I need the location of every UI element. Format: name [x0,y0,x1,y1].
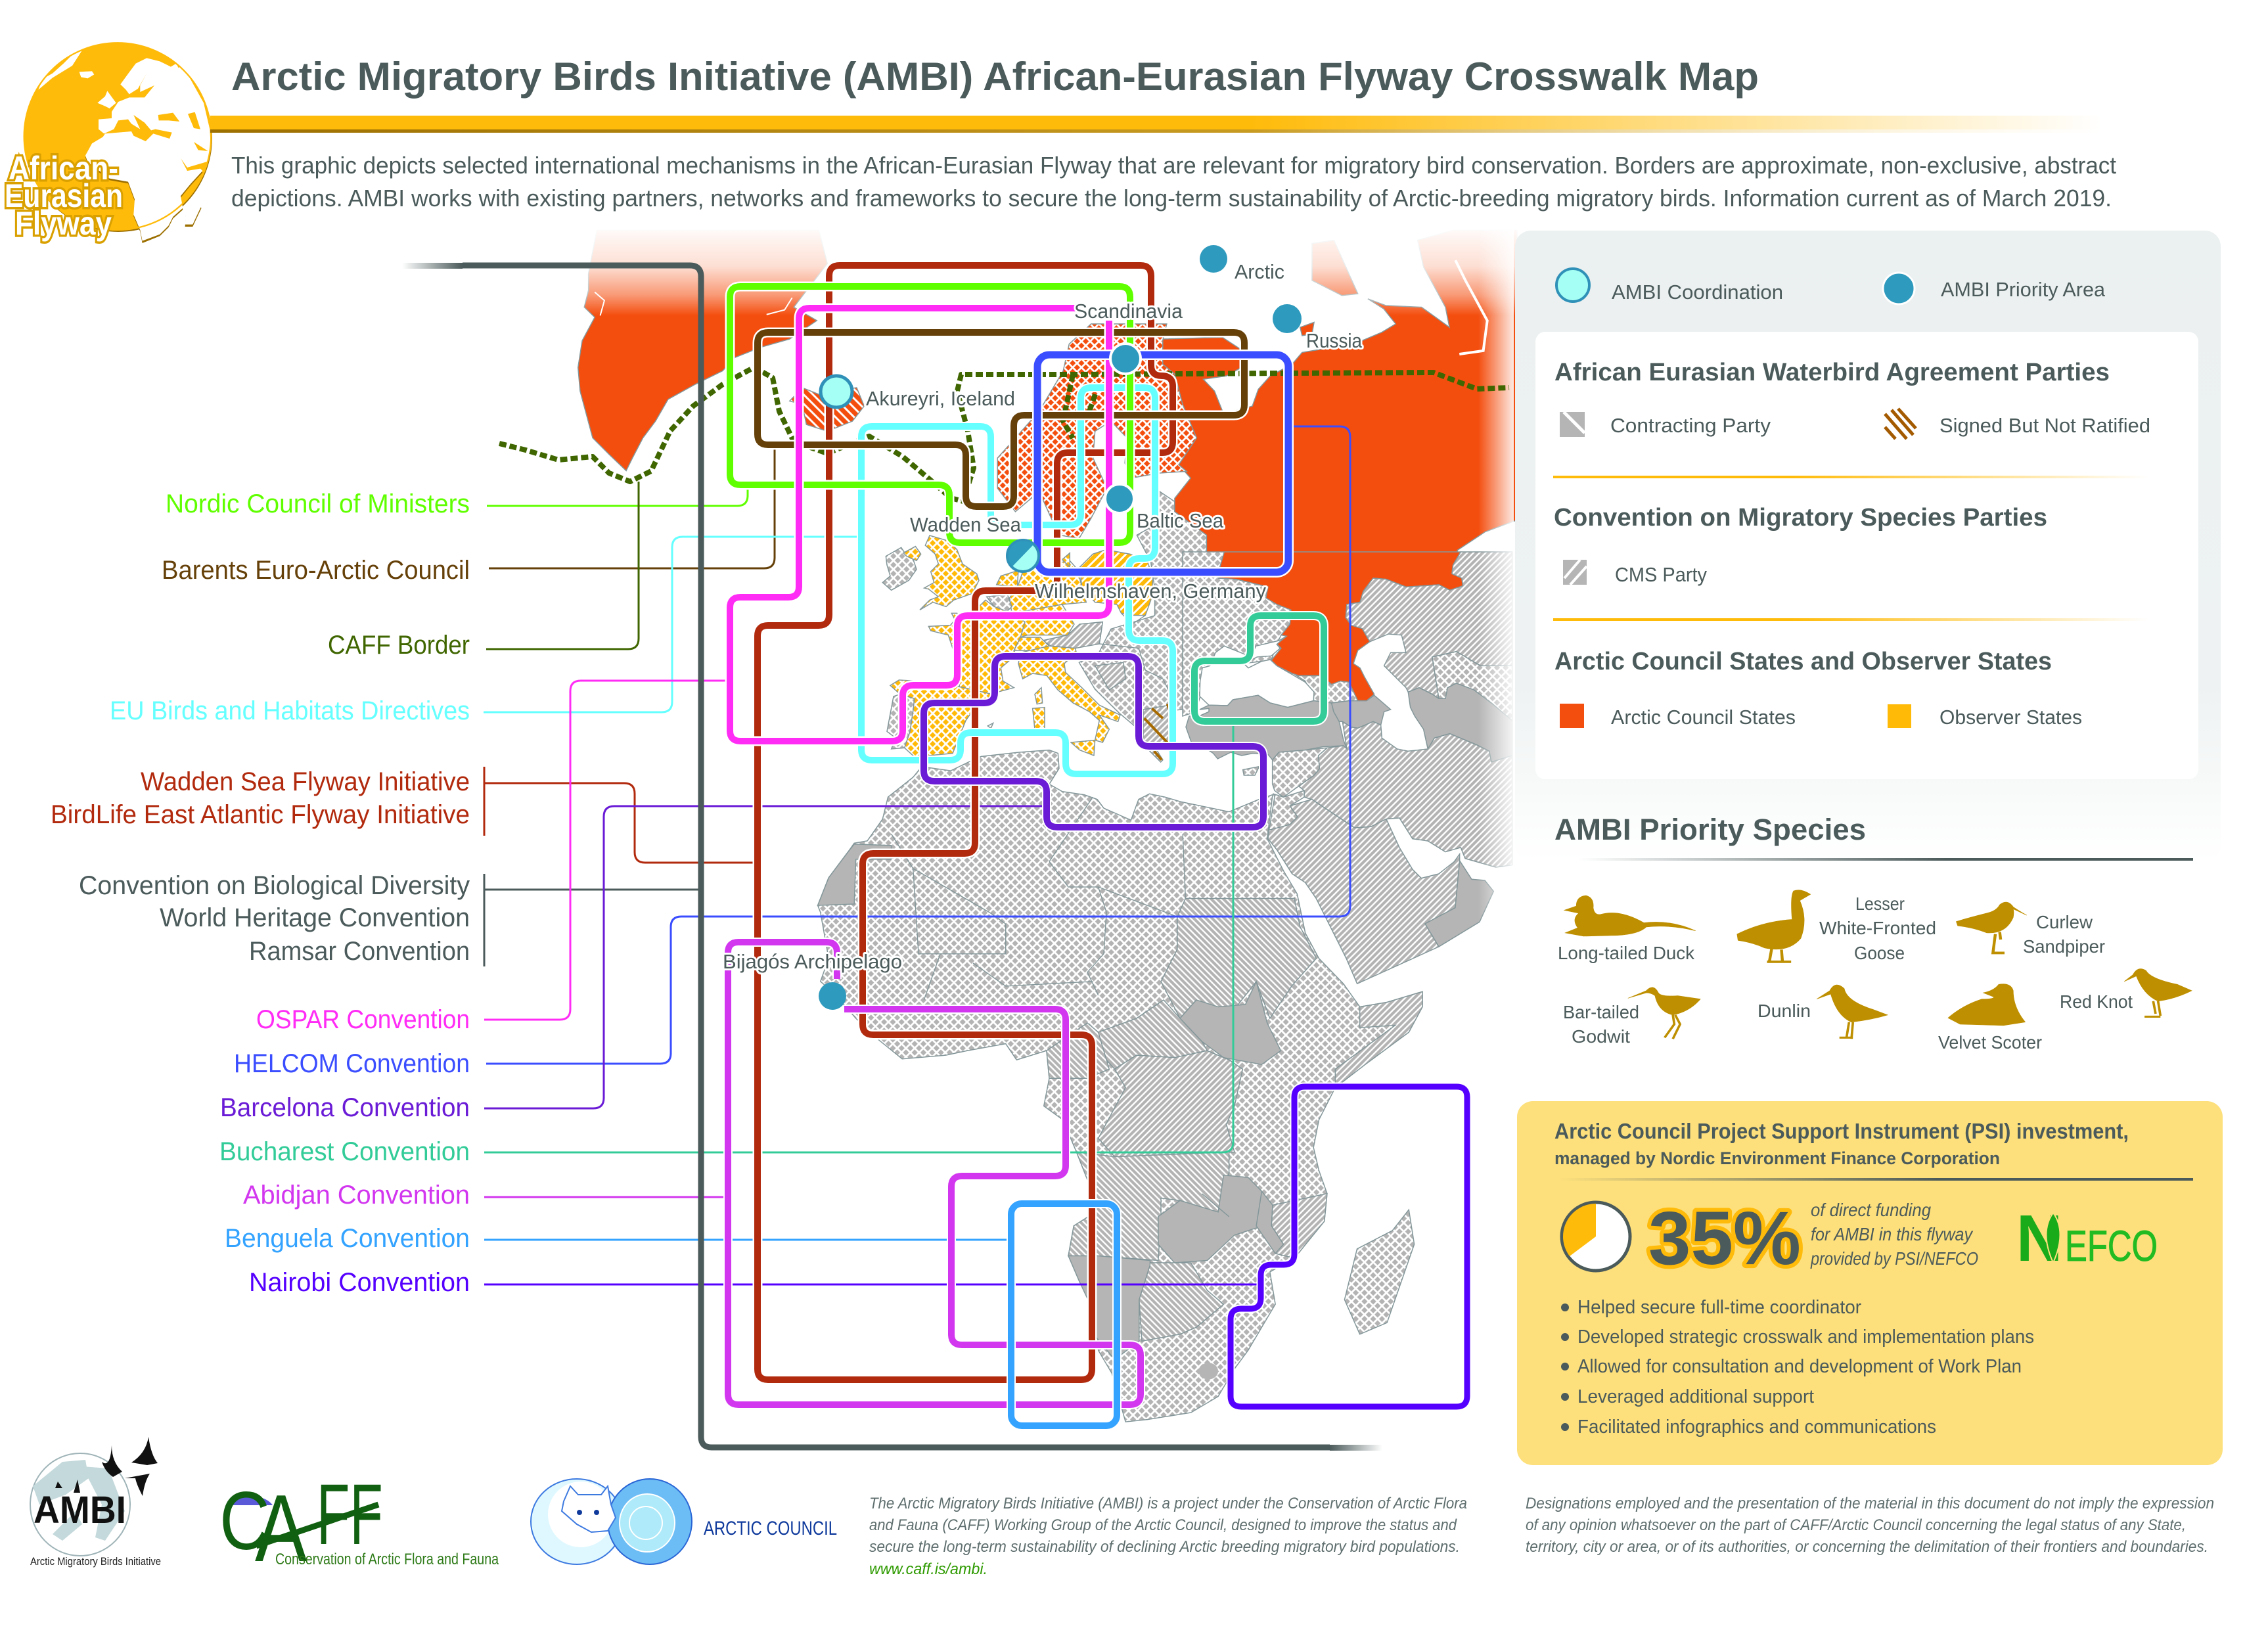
species names: Godwit [1572,1026,1630,1047]
heading: African Eurasian Waterbird Agreement Parties: African Eurasian Waterbird Agreement Parties [1554,359,2110,386]
icon: Lesser White-Fronted Goose [1737,890,1811,962]
leader: EU directives [484,537,861,712]
leader lines [484,426,1350,1284]
leader: Nordic Council [487,485,748,506]
icon: Velvet Scoter [1948,984,2026,1026]
text: about AMBI: secure the long-term sustainability of declining Arctic breeding migratory bird populations. [869,1538,1460,1556]
stat: 35%: 35% [1648,1196,1801,1281]
logo: NEFCO [2016,1202,2158,1275]
logo: Arctic Council: ARCTIC COUNCIL [704,1518,837,1539]
legend: AMBI Priority Area: AMBI Priority Area [1941,278,2106,301]
left mechanism labels: Ramsar Convention [249,937,470,966]
legend: AMBI Priority Area [1883,273,2106,304]
CAFF border dashed line [499,367,1509,501]
icon: Bar-tailed Godwit [1628,987,1700,1039]
intro text: This graphic depicts selected international mechanisms in the African-Eurasian Flyway that are relevant for migratory bird conservation. Borders are approximate, non-exclusive, abstract [231,152,2116,179]
panel: legend categories [1535,332,2198,779]
map labels: Russia [1306,329,1363,352]
legend: Contracting Party [1560,412,1771,437]
box: Barcelona Convention [924,656,1263,827]
right fade over map [1478,217,1514,946]
rule under species heading [1579,858,2193,861]
left mechanism labels: CAFF Border [328,631,470,660]
map labels: Bijagós Archipelago [723,950,902,973]
box: Nairobi Convention [1231,1087,1467,1407]
leader: Bucharest [484,721,1233,1152]
species names: Long-tailed Duck [1558,943,1695,963]
box: Abidjan Convention [728,942,1141,1405]
Russia north, Eastern Europe and Scandinavia [997,230,1517,746]
intro text: depictions. AMBI works with existing partners, networks and frameworks to secure the long-term sustainability of Arctic-breeding migratory birds. Information current as of March 2019. [231,185,2112,212]
box: HELCOM Convention [1037,355,1288,572]
top fade over map [578,217,1518,315]
stat caption: provided by PSI/NEFCO [1810,1248,1978,1269]
title: Arctic Migratory Birds Initiative (AMBI) African-Eurasian Flyway Crosswalk Map [231,55,1759,99]
box: OSPAR Convention [730,308,1109,741]
species names: Velvet Scoter [1938,1032,2042,1053]
bullet list: Leveraged additional support [1577,1386,1814,1407]
legend: AMBI Coordination [1556,269,1783,304]
leader: Abidjan [484,1196,728,1198]
Iceland [790,388,864,431]
species names: Goose [1854,943,1905,963]
text: disclaimer: Designations employed and the presentation of the material in this document do not imply the expression [1526,1495,2214,1512]
box: Benguela Convention [1011,1204,1117,1426]
stat caption: of direct funding [1811,1200,1931,1220]
bullet list [1561,1297,2034,1438]
left mechanism labels: EU Birds and Habitats Directives [110,696,470,725]
box: Barents Euro-Arctic Council [758,332,1244,507]
marker: Arctic priority area [1200,245,1227,273]
text: about AMBI: www.caff.is/ambi. [869,1560,987,1578]
legend: Contracting Party: Contracting Party [1610,414,1771,437]
left mechanism labels: Benguela Convention [225,1224,470,1253]
left mechanism labels: Wadden Sea Flyway Initiative [141,767,470,796]
legend: Signed But Not Ratified: Signed But Not Ratified [1939,414,2150,437]
panel: PSI investment [1517,1101,2223,1465]
pie chart: 35 percent [1562,1202,1630,1271]
left mechanism labels: Bucharest Convention [219,1137,470,1166]
bullet list: Helped secure full-time coordinator [1577,1297,1861,1318]
left mechanism labels: HELCOM Convention [234,1049,470,1078]
icon: Dunlin [1817,985,1888,1039]
map labels: Wadden Sea [910,513,1022,536]
left mechanism labels: World Heritage Convention [160,903,470,932]
legend: AMBI Coordination: AMBI Coordination [1612,281,1783,304]
left mechanism labels: Abidjan Convention [243,1181,470,1210]
left mechanism labels: Barcelona Convention [220,1093,470,1122]
Africa [818,750,1422,1422]
map labels: Scandinavia [1074,300,1183,323]
leader: CBD, World Heritage, Ramsar [484,874,700,966]
logo: NEFCO: EFCO [2065,1221,2158,1270]
species names: Curlew [2036,912,2093,932]
legend: CMS Party [1563,560,1707,586]
logo: African-Eurasian Flyway globe: Eurasian [5,177,123,214]
species names: Dunlin [1758,1001,1811,1021]
species names: Red Knot [2060,991,2133,1012]
logo: African-Eurasian Flyway globe: African- [9,150,118,187]
stat caption [1810,1200,1978,1269]
text: about AMBI: The Arctic Migratory Birds Initiative (AMBI) is a project under the Conservation of Arctic Flora [869,1495,1467,1512]
stat caption: for AMBI in this flyway [1811,1224,1974,1244]
map labels: Baltic Sea [1137,509,1224,532]
Greenland [578,230,827,471]
left mechanism labels: OSPAR Convention [256,1005,470,1034]
subheading: NEFCO: managed by Nordic Environment Finance Corporation [1554,1148,2000,1168]
text: disclaimer: of any opinion whatsoever on the part of CAFF/Arctic Council concerning the legal status of any State, [1526,1516,2186,1534]
leader: CAFF Border [486,482,639,649]
map labels: Wilhelmshaven, Germany [1035,579,1266,602]
left mechanism labels: Nairobi Convention [249,1268,470,1297]
marker: Russia priority area [1273,304,1302,333]
intro text [231,152,2116,212]
legend: Signed But Not Ratified [1885,409,2150,439]
leader: Nairobi [484,1284,1261,1285]
left mechanism labels [51,489,470,1297]
frame: CBD, World Heritage and Ramsar border [402,263,1382,1451]
marker: Bijagos priority area [819,982,846,1010]
icon: Curlew Sandpiper [1956,902,2027,953]
logo: AMBI [30,1437,161,1568]
species names: Sandpiper [2023,936,2105,957]
logo: AMBI: AMBI [34,1489,126,1531]
logo: African-Eurasian Flyway globe: Flyway [15,205,112,242]
panel: legend [1515,231,2221,861]
species names [1558,894,2133,1053]
marker: Scandinavia priority area [1110,344,1141,374]
heading: AMBI Priority Species: AMBI Priority Species [1554,813,1866,846]
Black Sea region, Caucasus, Central Asia, Middle East [1183,552,1512,984]
species names: Bar-tailed [1563,1002,1639,1022]
logo: African-Eurasian Flyway globe [5,43,212,243]
map labels: Akureyri, Iceland [866,387,1015,410]
species names: White-Fronted [1819,918,1936,938]
logo: NEFCO: N [2016,1202,2062,1275]
text: disclaimer [1526,1495,2214,1556]
title bar [210,116,2102,133]
bullet list: Developed strategic crosswalk and implementation plans [1577,1326,2034,1348]
legend: CMS Party: CMS Party [1615,563,1707,586]
leader: OSPAR [484,681,730,1020]
logo: CAFF [219,1467,499,1582]
bullet list: Facilitated infographics and communications [1577,1417,1936,1438]
leader: Benguela [484,1239,1011,1240]
text: about AMBI: and Fauna (CAFF) Working Group of the Arctic Council, designed to improve the status and [869,1516,1457,1534]
logo: AMBI: Arctic Migratory Birds Initiative [30,1555,161,1568]
logo: Arctic Council [531,1479,837,1564]
heading: Arctic Council States and Observer States: Arctic Council States and Observer States [1554,648,2052,675]
marker: Wilhelmshaven half coordination half priority [1007,540,1039,572]
logo: CAFF: C [219,1475,270,1567]
left mechanism labels: Convention on Biological Diversity [79,871,470,900]
box: Wadden Sea and BirdLife flyway initiatives [758,265,1173,1380]
icon: Long-tailed Duck [1564,895,1696,936]
marker: Baltic Sea priority area [1105,484,1134,513]
leader: Barents [489,445,775,568]
heading: Convention on Migratory Species Parties: Convention on Migratory Species Parties [1554,504,2047,532]
leader: HELCOM [486,426,1350,1064]
logo: CAFF: FF [317,1467,383,1563]
legend: Observer States [1888,704,2082,729]
map labels [723,260,1363,973]
legend: Observer States: Observer States [1939,706,2082,729]
heading: PSI investment: Arctic Council Project Support Instrument (PSI) investment, [1554,1119,2129,1143]
text: disclaimer: territory, city or area, or of its authorities, or concerning the delimitation of their frontiers and boundaries. [1526,1538,2208,1556]
species silhouettes [1564,890,2192,1039]
text: about AMBI [869,1495,1467,1578]
marker: Akureyri coordination [821,376,852,407]
map labels: Arctic [1235,260,1284,283]
Western and Central Europe [882,535,1169,762]
left mechanism labels: Barents Euro-Arctic Council [162,556,470,585]
left mechanism labels: BirdLife East Atlantic Flyway Initiative [51,800,470,829]
map: countries of the African-Eurasian flyway [578,230,1517,1422]
leader: Barcelona [484,806,1047,1108]
logo: CAFF: Conservation of Arctic Flora and Fauna [275,1551,499,1568]
leader: Wadden Sea and BirdLife [484,767,758,863]
species names: Lesser [1855,894,1905,914]
icon: Red Knot [2124,969,2192,1016]
box: Nordic Council of Ministers [730,286,1130,543]
box: EU Birds and Habitats Directives [861,388,1173,774]
logo: CAFF: A [255,1476,307,1582]
box: Bucharest Convention [1194,616,1324,721]
legend: Arctic Council States: Arctic Council States [1611,706,1796,729]
left mechanism labels: Nordic Council of Ministers [166,489,470,518]
bullet list: Allowed for consultation and development of Work Plan [1577,1356,2022,1377]
